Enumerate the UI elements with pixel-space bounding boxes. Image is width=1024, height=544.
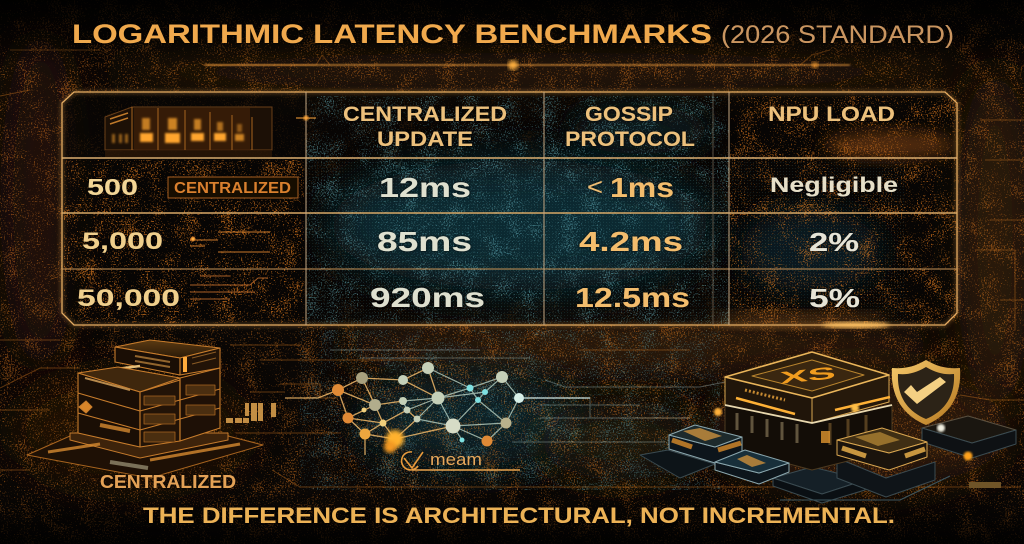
circuit accent: 50,000 row <box>190 276 268 299</box>
row: 50,000 nodes: 12.5ms <box>575 282 690 313</box>
row: 5,000 nodes: 4.2ms <box>579 226 683 257</box>
table header: gossip protocol: PROTOCOL <box>565 128 695 151</box>
panel: benchmark table <box>62 92 957 328</box>
row: 5,000 nodes: 5,000 <box>82 228 163 255</box>
row: 500 nodes: Negligible <box>770 174 898 197</box>
icon: server rack <box>105 107 272 157</box>
row: 5,000 nodes <box>82 226 859 257</box>
row: 500 nodes <box>87 172 898 203</box>
illustration: gossip mesh network <box>285 362 590 470</box>
table header: gossip protocol <box>565 103 695 151</box>
lower server tiers <box>78 367 220 447</box>
illustration: centralized server stack <box>27 340 263 478</box>
rooftop: XS <box>779 363 837 388</box>
row: 500 nodes: 1ms <box>610 172 674 203</box>
badge: centralized: CENTRALIZED <box>174 180 291 197</box>
teal cell haze <box>330 106 880 290</box>
icon: check mark <box>904 377 946 404</box>
row: 50,000 nodes: 50,000 <box>77 285 180 312</box>
table header: NPU load: NPU LOAD <box>768 103 895 126</box>
table header: centralized update: CENTRALIZED <box>343 103 507 126</box>
circuit accent: 5,000 row <box>190 232 270 252</box>
logo: meam: meam <box>430 450 482 469</box>
rooftop <box>725 352 889 398</box>
label: centralized: CENTRALIZED <box>100 472 236 492</box>
title: LOGARITHMIC LATENCY BENCHMARKS <box>72 19 712 49</box>
row: 50,000 nodes <box>77 282 860 313</box>
dark surrounding chips <box>640 416 1016 503</box>
mini bar glyphs <box>226 403 276 423</box>
row: 500 nodes: < <box>587 174 603 201</box>
chip modules <box>669 425 927 484</box>
table header: gossip protocol: GOSSIP <box>585 103 673 126</box>
row: 5,000 nodes: 2% <box>809 227 859 257</box>
upper server <box>92 340 220 375</box>
row: 500 nodes: 500 <box>87 174 138 200</box>
row: 50,000 nodes: 920ms <box>370 282 485 313</box>
row: 50,000 nodes: 5% <box>809 283 860 313</box>
closing statement: THE DIFFERENCE IS ARCHITECTURAL, NOT INCREMENTAL. <box>143 503 895 528</box>
title <box>72 19 954 49</box>
table header: centralized update: UPDATE <box>377 128 473 151</box>
icon: security shield <box>892 360 960 425</box>
illustration: gossip data center <box>640 352 1016 503</box>
base plate <box>27 433 263 478</box>
logo: meam <box>402 450 482 470</box>
row: 5,000 nodes: 85ms <box>377 226 472 257</box>
row: 500 nodes: 12ms <box>379 172 471 203</box>
title: (2026 STANDARD) <box>721 21 954 49</box>
table header: centralized update <box>343 103 507 151</box>
